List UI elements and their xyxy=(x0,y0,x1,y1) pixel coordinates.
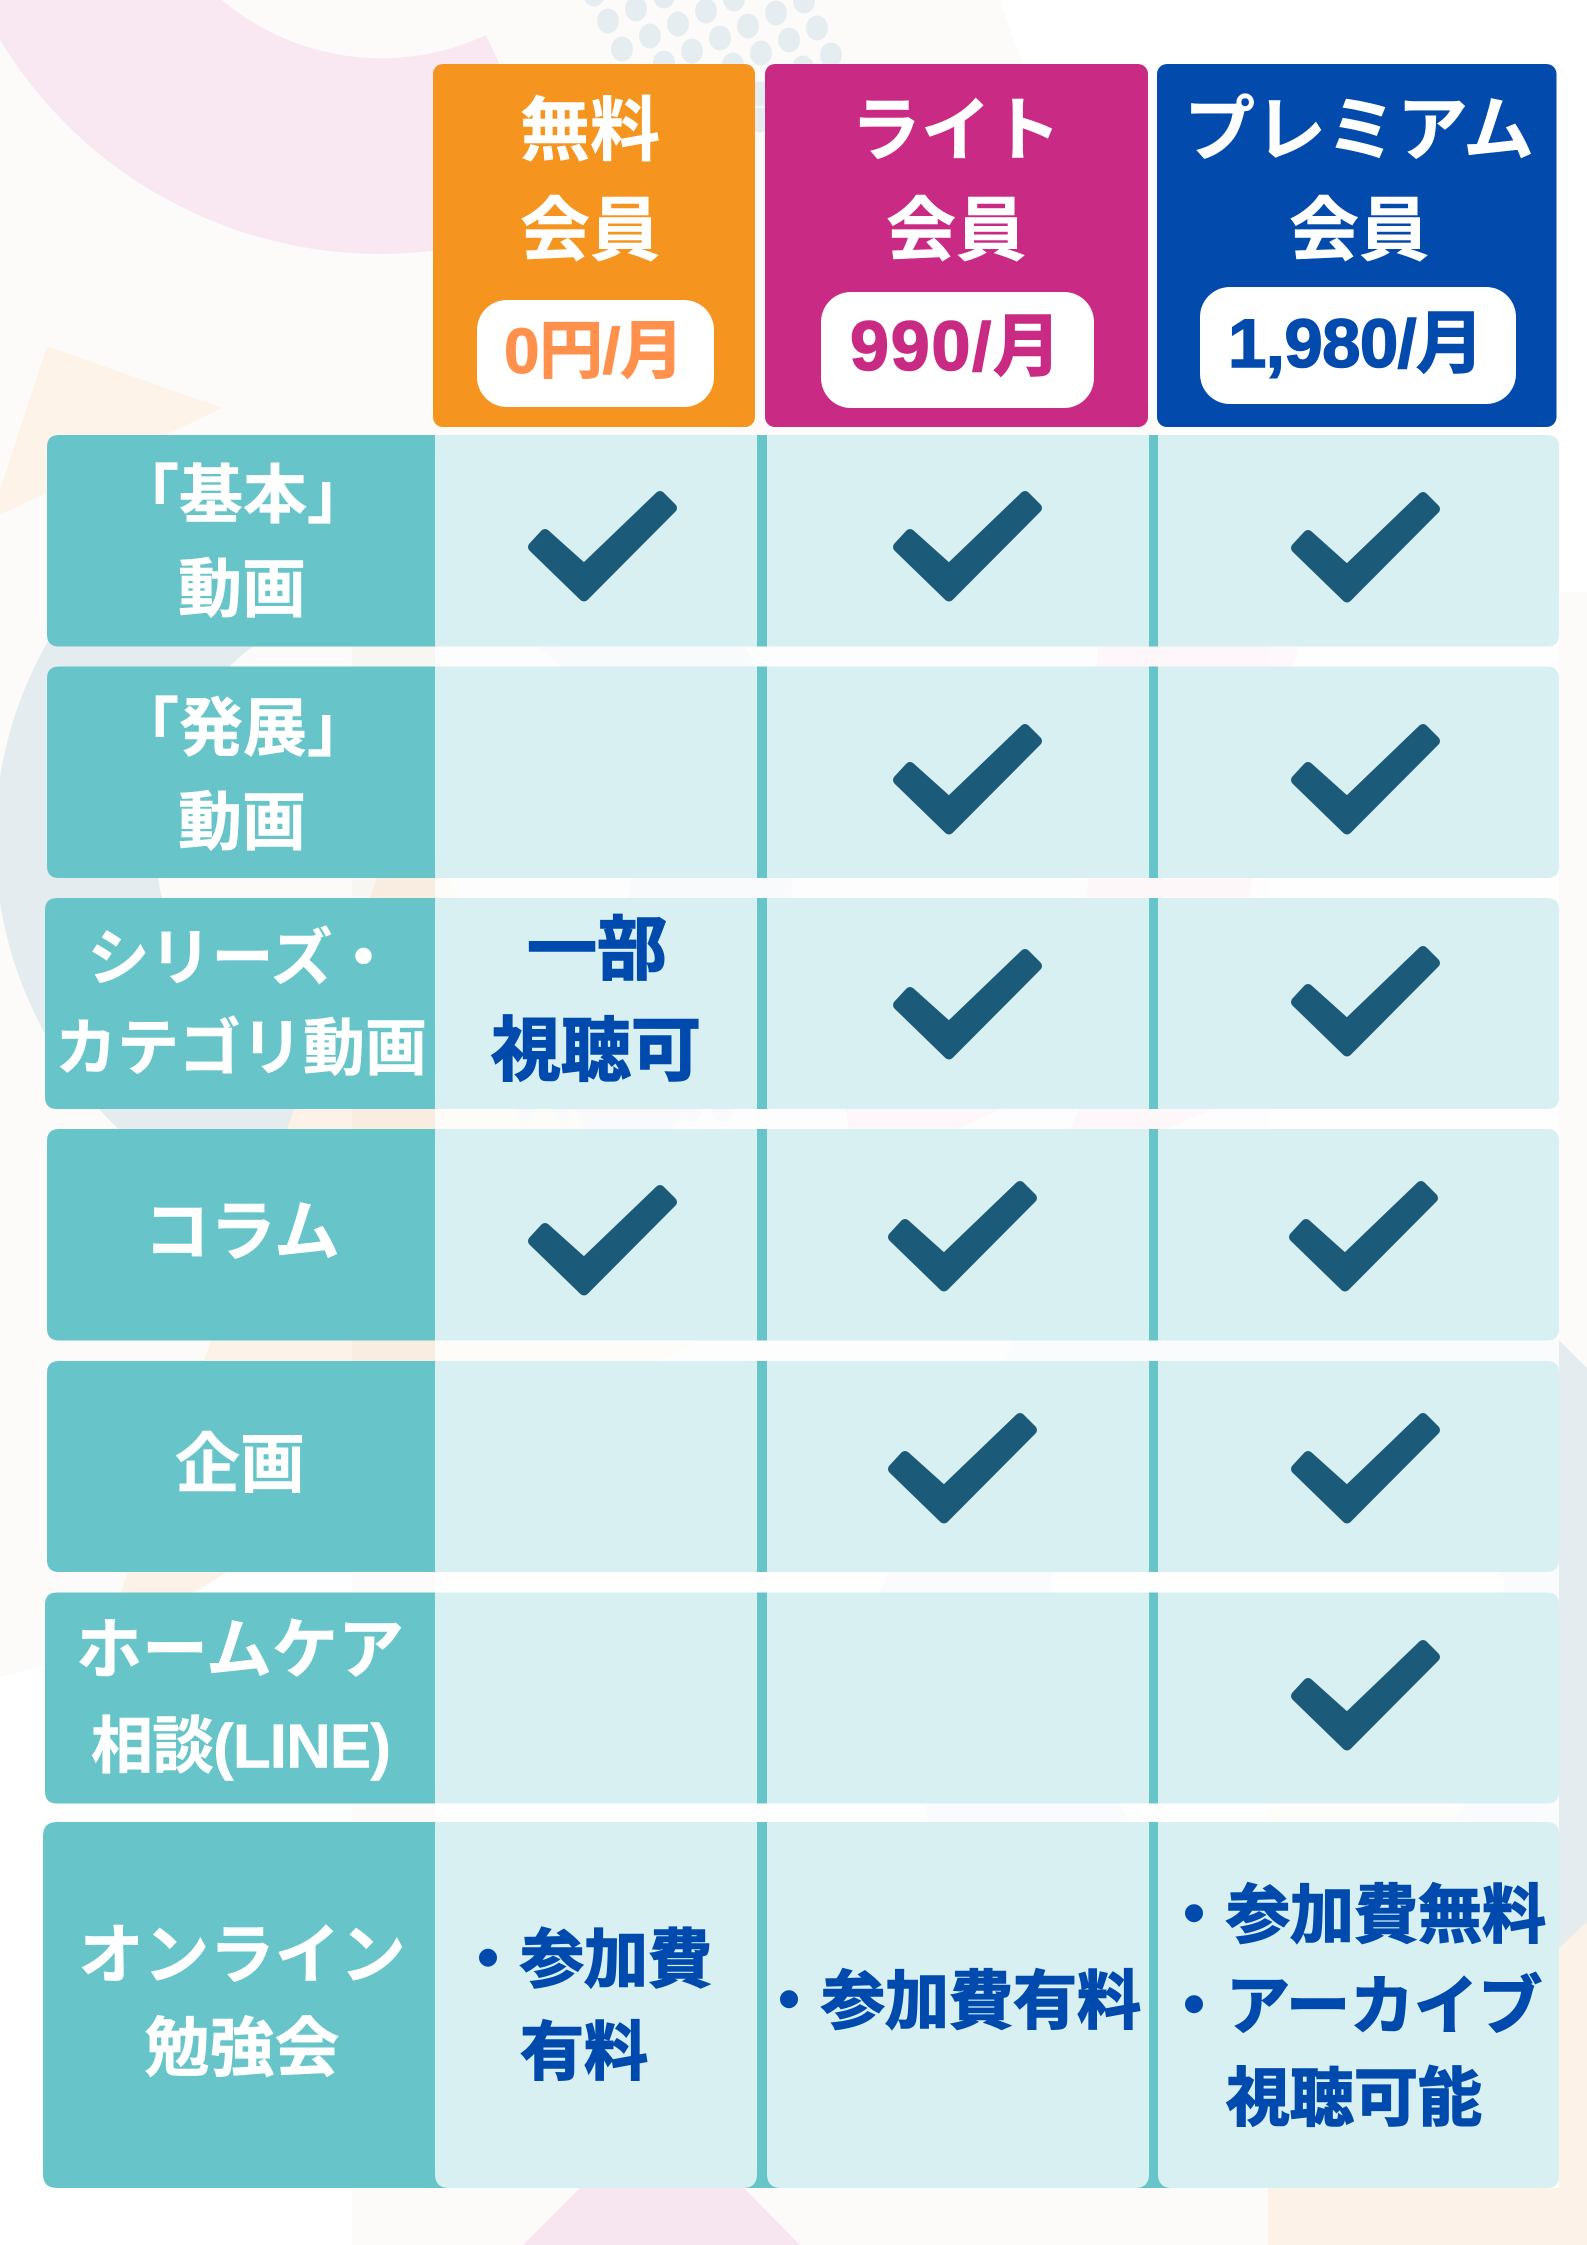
plan name: 無料 xyxy=(520,92,660,170)
icon: check premium xyxy=(1296,497,1435,598)
row label line 2: 動画 xyxy=(178,786,306,858)
header: premium plan xyxy=(1157,64,1556,427)
price: 1,980/月 xyxy=(1228,305,1484,382)
row: features xyxy=(47,1361,1559,1572)
icon: check light xyxy=(898,496,1037,596)
row label line 2: 相談(LINE) xyxy=(91,1712,391,1781)
row label: オンライン xyxy=(78,1918,406,1991)
row label: 企画 xyxy=(175,1427,305,1500)
row label: 「発展」 xyxy=(115,692,371,764)
premium note 2: ・アーカイブ xyxy=(1162,1970,1542,2042)
icon: check premium xyxy=(1296,1418,1435,1518)
icon: check premium xyxy=(1296,729,1435,830)
price: 0円/月 xyxy=(504,315,684,387)
icon: check light xyxy=(898,954,1037,1054)
row: basic videos xyxy=(47,435,1559,646)
row: column articles xyxy=(47,1129,1559,1340)
row label line 2: カテゴリ動画 xyxy=(55,1015,427,1084)
price pill xyxy=(477,300,714,407)
row: online study sessions xyxy=(43,1822,1559,2188)
icon: check light xyxy=(893,1186,1032,1286)
row: home care consultation xyxy=(45,1592,1559,1804)
member label: 会員 xyxy=(886,192,1026,270)
row label: 「基本」 xyxy=(115,459,371,531)
member label: 会員 xyxy=(1289,192,1429,270)
light plan note: ・参加費有料 xyxy=(757,1965,1141,2037)
row label: シリーズ・ xyxy=(88,925,394,994)
icon: check premium xyxy=(1294,1186,1433,1286)
partial access text line 2: 視聴可 xyxy=(491,1012,701,1090)
row: advanced videos xyxy=(47,666,1559,878)
row: series and category videos xyxy=(45,898,1559,1109)
icon: check light xyxy=(898,729,1037,830)
free plan note: ・参加費 xyxy=(456,1924,712,1996)
icon: check premium xyxy=(1296,951,1435,1052)
icon: check free xyxy=(533,496,672,596)
header: free plan xyxy=(433,64,755,427)
free plan note line 2: 有料 xyxy=(520,2016,648,2088)
icon: check free xyxy=(533,1190,672,1290)
row label: コラム xyxy=(144,1194,340,1268)
header: light plan xyxy=(765,64,1148,427)
plan name: ライト xyxy=(851,92,1061,170)
price pill xyxy=(821,292,1094,408)
row label line 2: 勉強会 xyxy=(144,2011,340,2084)
price pill xyxy=(1200,287,1516,404)
plan name: プレミアム xyxy=(1184,92,1534,171)
premium note 1: ・参加費無料 xyxy=(1162,1879,1546,1951)
icon: check light xyxy=(893,1418,1032,1518)
row label line 2: 動画 xyxy=(178,553,306,625)
price: 990/月 xyxy=(850,307,1061,385)
icon: check premium xyxy=(1296,1645,1435,1746)
row label: ホームケア xyxy=(76,1612,404,1686)
member label: 会員 xyxy=(520,192,660,270)
premium note 2 line 2: 視聴可能 xyxy=(1226,2062,1482,2134)
partial access text: 一部 xyxy=(527,911,667,989)
